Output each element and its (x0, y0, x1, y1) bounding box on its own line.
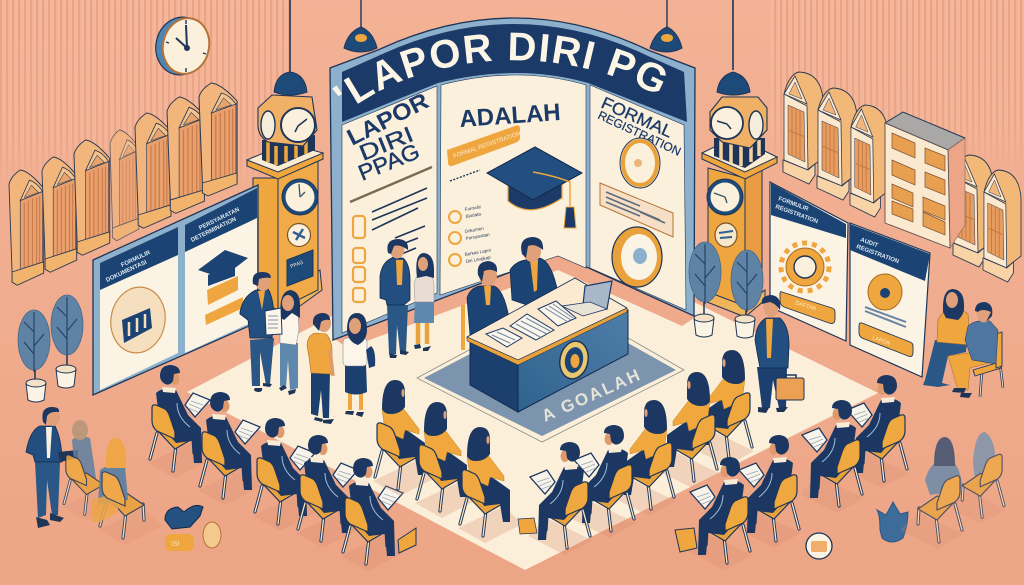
peach strip along the main board (333, 252, 697, 348)
board three (770, 182, 848, 341)
round icon (806, 533, 832, 559)
graduation cap (487, 147, 582, 228)
board four (850, 223, 930, 377)
right row of seated women (612, 350, 754, 516)
standing man right with briefcase (755, 295, 804, 413)
bag on floor centre (518, 518, 537, 534)
woman by board (414, 253, 434, 351)
cabinet right (885, 112, 965, 248)
left panel text lines (350, 167, 432, 202)
plants right (689, 242, 763, 338)
left row of arched panels (9, 83, 237, 285)
board two (185, 188, 257, 353)
middle panel icons and text (449, 211, 461, 266)
briefcase on floor left (398, 528, 416, 553)
left panel heading: PPAG (355, 138, 423, 186)
middle board panel: Berkas Lapor (464, 247, 492, 257)
left panel heading: DIRI (356, 121, 417, 166)
upper pair of seated men (800, 375, 909, 513)
briefcase (776, 375, 804, 400)
board four: LAPOR (871, 335, 891, 347)
gear icon (781, 243, 829, 291)
right hanging cord and clock tower (702, 0, 777, 317)
board three: FORMULIR (777, 196, 810, 213)
staff right (510, 237, 559, 306)
form block (600, 183, 673, 237)
left panel heading: LAPOR (342, 87, 433, 150)
board one (100, 227, 178, 390)
left panel heading (342, 87, 433, 186)
banner title: 'LAPOR DIRI PG (332, 32, 666, 104)
board four: REGISTRATION (855, 244, 900, 265)
left hanging cord and clock tower: PPAG (290, 260, 304, 270)
hanging lamp left (344, 0, 377, 52)
left display boards (93, 185, 258, 395)
faded seated people left (62, 420, 162, 545)
heading: adalah: ADALAH (459, 99, 561, 133)
left panel icons (353, 216, 365, 302)
middle board panel (440, 75, 586, 295)
bag clump on floor left (165, 505, 221, 551)
lower pair of seated men (688, 435, 801, 570)
staff at desk (463, 237, 559, 350)
woman (923, 289, 970, 387)
heading: formal registration: REGISTRATION (596, 108, 683, 159)
right display boards (770, 182, 930, 377)
hijab woman with bag (343, 313, 375, 417)
cream floor (187, 228, 878, 570)
man in orange shirt (307, 313, 334, 424)
bag clump on floor left: ISI (171, 541, 180, 548)
left hanging cord and clock tower (247, 0, 323, 322)
laptop (562, 281, 612, 316)
striped wall right (771, 0, 1024, 134)
middle board panel: Dokumen (464, 226, 485, 234)
blue rug: A GOALAH (539, 366, 643, 426)
middle board panel: Persyaratan (465, 232, 491, 241)
papers on desk (486, 301, 576, 347)
board one: DOKUMENTASI (105, 260, 148, 284)
middle board panel: Diri Lengkap (465, 255, 492, 264)
man by board in suit (380, 239, 410, 358)
right row of arched panels (783, 72, 1021, 282)
board three: REGISTRATION (774, 204, 819, 225)
orange pill: FORMAL REGISTRATION (453, 131, 522, 160)
desk emblem (556, 339, 592, 381)
plants left (18, 295, 83, 402)
heading: formal registration: FORMAL (598, 93, 676, 142)
seated women row (373, 380, 522, 543)
faded seated people right (900, 432, 1006, 549)
striped wall left (0, 0, 289, 148)
seated couple right (923, 289, 1003, 398)
staff left (463, 261, 509, 350)
board three: DAFTAR (794, 300, 817, 313)
board four: AUDIT (859, 237, 879, 249)
standing man left (26, 407, 78, 528)
bag on floor right (675, 528, 697, 552)
reception desk (467, 278, 628, 412)
man (948, 302, 998, 398)
board one: FORMULIR (120, 250, 152, 269)
board banner (342, 24, 687, 122)
left board panel (342, 86, 437, 333)
standing pair with paper (240, 272, 300, 395)
chair (973, 332, 1003, 397)
board two: DETERMINATION (190, 217, 237, 244)
left row of seated readers (148, 365, 405, 571)
board two: PERSYARATAN (198, 207, 241, 232)
wall clock (151, 12, 214, 80)
main board frame (330, 18, 695, 340)
middle board panel: Biodata (465, 211, 482, 219)
right row of seated men (528, 425, 636, 555)
hanging lamp right (650, 0, 682, 52)
blue rug (417, 300, 684, 442)
middle board panel: Formulir (464, 204, 482, 212)
seal circle (620, 138, 660, 188)
blue plant on floor right (877, 502, 908, 542)
orange pill (447, 125, 522, 166)
right board panel (590, 85, 686, 310)
lower seal (612, 227, 662, 287)
